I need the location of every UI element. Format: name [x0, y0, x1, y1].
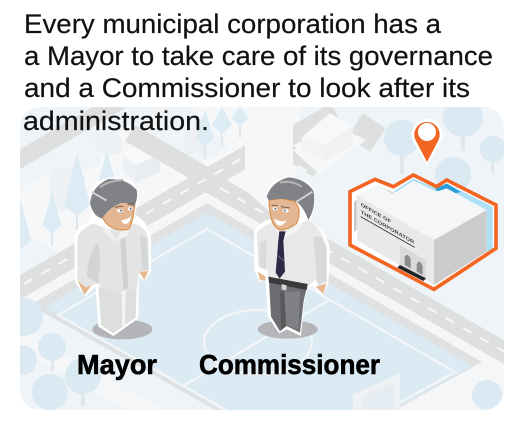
roof	[357, 181, 487, 240]
roads	[10, 98, 510, 356]
goal frame	[353, 373, 400, 410]
road lane dashes	[24, 156, 505, 352]
hands	[258, 272, 266, 281]
building sign text: THE CORPORATOR	[361, 209, 415, 246]
belt	[268, 277, 308, 290]
heading text: Every municipal corporation has a	[24, 9, 442, 39]
face	[100, 202, 135, 230]
plaza pavement	[207, 193, 504, 364]
building, top centre	[293, 113, 366, 175]
office of the corporator building	[350, 175, 496, 289]
trousers	[269, 282, 307, 333]
heading text: administration.	[23, 106, 209, 136]
eyes and mouth	[117, 209, 123, 212]
city blocks, top left	[124, 150, 152, 164]
label: commissioner: Commissioner	[199, 349, 380, 380]
left wall	[357, 195, 434, 285]
panel: isometric city map background	[5, 97, 510, 410]
label: mayor: Mayor	[77, 349, 157, 380]
face	[269, 198, 299, 230]
heading text: and a Commissioner to look after its	[24, 73, 470, 103]
icon: location pin	[412, 119, 442, 166]
right wall	[434, 210, 487, 285]
court white lines	[58, 229, 455, 410]
hair	[90, 179, 137, 218]
shadow	[258, 320, 318, 339]
heading text: a Mayor to take care of its governance	[24, 41, 493, 71]
door porch	[397, 245, 426, 281]
figure: commissioner	[254, 177, 330, 339]
building sign text: OFFICE OF	[361, 202, 391, 225]
halo	[254, 177, 330, 336]
orange outline	[350, 175, 496, 289]
round trees	[5, 97, 506, 410]
heading text	[23, 9, 493, 136]
tall white building	[245, 125, 293, 212]
plaza gray border	[30, 203, 482, 410]
shadow	[92, 319, 152, 339]
shirt	[257, 220, 327, 287]
eyes and mouth	[273, 207, 277, 210]
hair	[267, 177, 314, 220]
figure: mayor	[74, 177, 152, 339]
building sign text	[361, 202, 415, 246]
tie	[276, 231, 286, 279]
pine trees	[20, 107, 249, 250]
plaza blue court	[45, 213, 472, 410]
halo	[74, 177, 151, 336]
hands	[77, 280, 92, 295]
body	[77, 223, 149, 293]
